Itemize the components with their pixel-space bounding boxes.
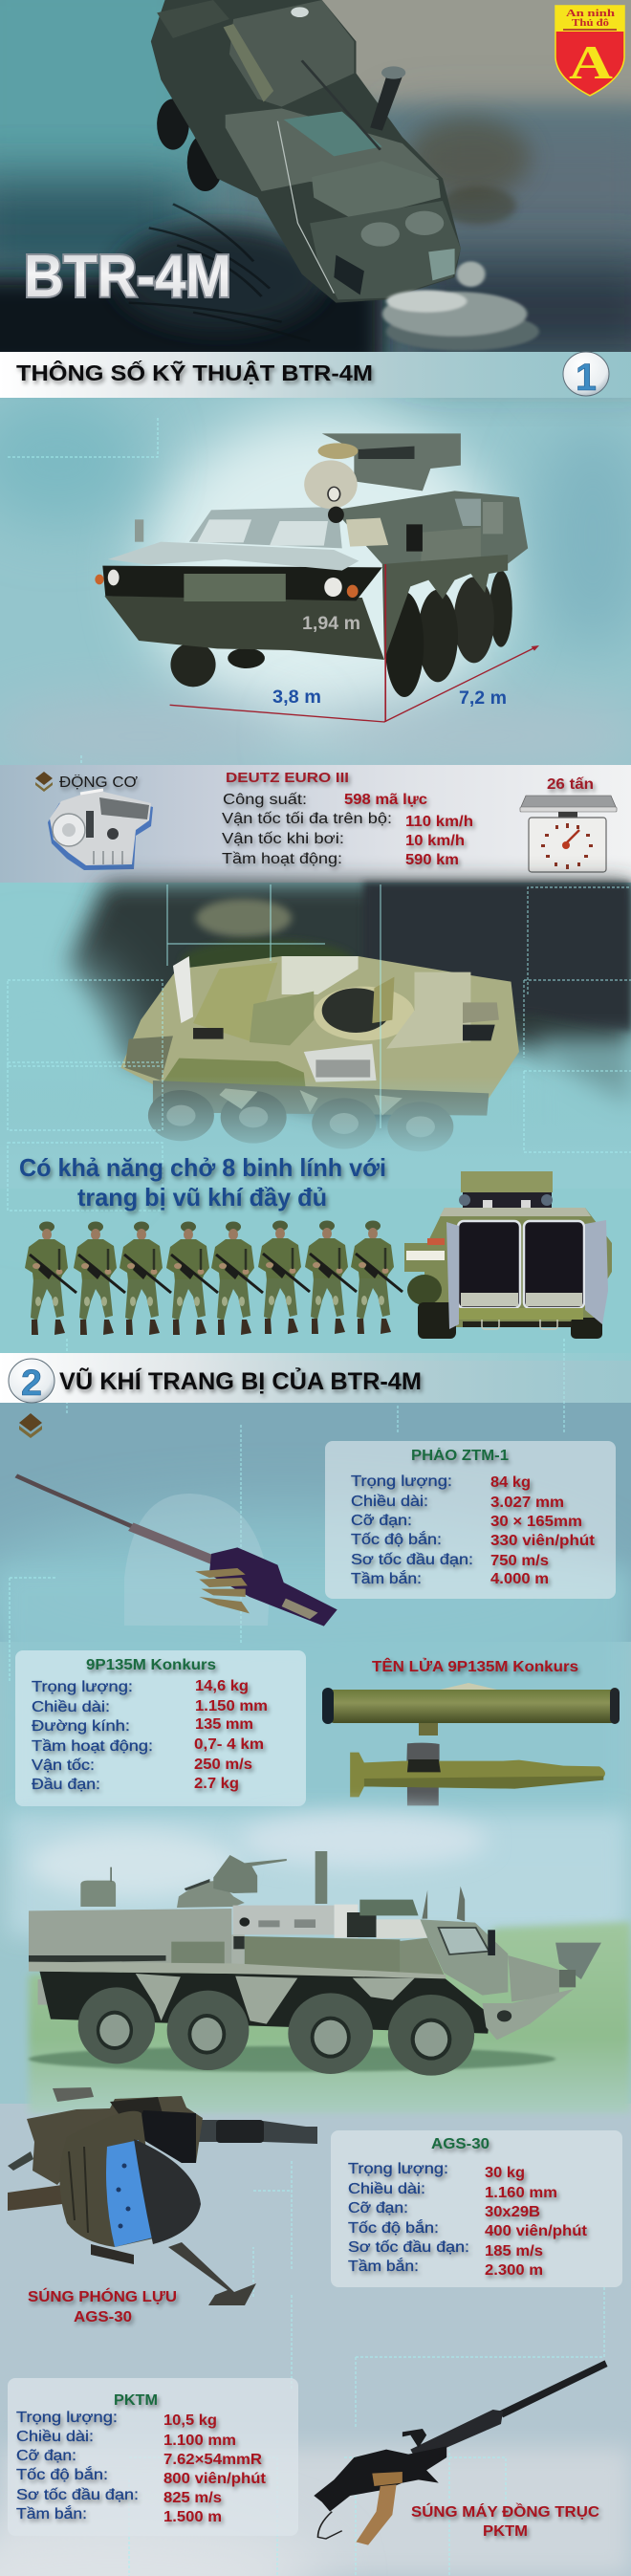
weapon: PKTM machine gun — [314, 2360, 608, 2545]
panel: AGS-30: Cỡ đạn: — [348, 2200, 408, 2216]
text: carrying capacity — [19, 1153, 386, 1212]
panel: 9P135M Konkurs: 9P135M Konkurs — [86, 1657, 216, 1673]
panel: AGS-30 — [331, 2130, 622, 2287]
panel: 9P135M Konkurs: Trọng lượng: — [32, 1679, 133, 1695]
panel: PKTM: Cỡ đạn: — [16, 2448, 76, 2464]
engine spec text: Vận tốc khi bơi: — [222, 831, 344, 847]
panel: ZTM-1: Sơ tốc đầu đạn: — [351, 1552, 473, 1568]
PKTM label — [411, 2502, 599, 2540]
panel: AGS-30: 2.300 m — [485, 2262, 543, 2279]
panel: ZTM-1: 4.000 m — [490, 1571, 549, 1587]
icon: engine — [48, 790, 153, 870]
panel: PKTM: 7.62×54mmR — [163, 2452, 262, 2468]
panel: ZTM-1: PHÁO ZTM-1 — [411, 1448, 509, 1464]
panel: engine specs — [0, 765, 631, 883]
AGS-30 label: SÚNG PHÓNG LỰU — [28, 2287, 177, 2305]
logo: An ninh Thủ đô shield: An ninh — [566, 8, 615, 19]
text: carrying capacity: trang bị vũ khí đầy đủ — [77, 1183, 327, 1212]
weapon: ZTM-1 cannon — [16, 1475, 337, 1626]
weapon: AGS-30 grenade launcher — [8, 2087, 317, 2305]
engine spec text: Tầm hoạt động: — [222, 851, 342, 867]
engine spec text: 10 km/h — [405, 833, 465, 849]
engine spec text — [222, 770, 473, 868]
header band 1 — [0, 352, 631, 398]
panel: 9P135M Konkurs: 1.150 mm — [195, 1698, 268, 1714]
panel: AGS-30: AGS-30 — [431, 2136, 490, 2152]
panel: 9P135M Konkurs: Đường kính: — [32, 1718, 130, 1735]
heading: weapons: VŨ KHÍ TRANG BỊ CỦA BTR-4M — [59, 1366, 422, 1395]
badge 2: 2 — [21, 1364, 42, 1404]
panel: AGS-30: 30 kg — [485, 2165, 525, 2181]
icon: layers — [19, 1413, 42, 1438]
panel: 9P135M Konkurs — [15, 1650, 306, 1806]
panel: 9P135M Konkurs: 135 mm — [195, 1716, 253, 1733]
missile label: TÊN LỬA 9P135M Konkurs — [372, 1657, 578, 1675]
dimension labels: 7,2 m — [459, 688, 507, 709]
engine label: ĐỘNG CƠ — [59, 775, 138, 791]
logo: An ninh Thủ đô shield — [555, 6, 624, 96]
vehicle rear view with open doors — [404, 1171, 612, 1339]
panel: 9P135M Konkurs: 250 m/s — [194, 1757, 252, 1773]
badge 1 — [563, 352, 609, 399]
panel: PKTM: 1.500 m — [163, 2509, 222, 2525]
panel: ZTM-1 — [325, 1441, 616, 1599]
panel: AGS-30: Trọng lượng: — [348, 2161, 448, 2177]
panel: 9P135M Konkurs: 2.7 kg — [194, 1776, 239, 1792]
panel: 9P135M Konkurs: Đầu đạn: — [32, 1777, 100, 1793]
panel: ZTM-1: 84 kg — [490, 1474, 531, 1491]
missile launch tube — [322, 1683, 620, 1736]
panel: AGS-30: 30x29B — [485, 2204, 540, 2220]
panel: ZTM-1: Trọng lượng: — [351, 1474, 452, 1490]
panel: ZTM-1: 3.027 mm — [490, 1495, 564, 1511]
engine spec text: Công suất: — [223, 792, 307, 808]
panel: ZTM-1: Cỡ đạn: — [351, 1513, 412, 1529]
panel: AGS-30: Chiều dài: — [348, 2181, 425, 2197]
icon: layers — [35, 772, 53, 792]
panel: PKTM: Chiều dài: — [16, 2429, 94, 2445]
panel: PKTM: PKTM — [114, 2392, 158, 2409]
panel: 9P135M Konkurs: Tầm hoạt động: — [32, 1738, 153, 1755]
badge 2 — [9, 1359, 54, 1404]
PKTM label: PKTM — [483, 2523, 528, 2540]
badge 1: 1 — [576, 357, 597, 399]
panel: AGS-30: 185 m/s — [485, 2243, 543, 2259]
panel: ZTM-1: Tốc độ bắn: — [351, 1532, 442, 1548]
hero photo: BTR-4M in water — [0, 0, 631, 373]
logo: An ninh Thủ đô shield: A — [569, 35, 613, 89]
panel: PKTM: 800 viên/phút — [163, 2471, 266, 2487]
weight label: 26 tấn — [547, 776, 594, 793]
panel: PKTM: Tốc độ bắn: — [16, 2467, 108, 2483]
text: carrying capacity: Có khả năng chở 8 binh lính với — [19, 1153, 386, 1182]
photo: vehicle from above — [0, 883, 631, 1211]
missile — [350, 1743, 605, 1805]
panel: AGS-30: Tốc độ bắn: — [348, 2220, 439, 2237]
dimension labels: 1,94 m — [302, 614, 360, 634]
logo: An ninh Thủ đô shield: Thủ đô — [572, 17, 610, 29]
panel: ZTM-1: 750 m/s — [490, 1553, 549, 1569]
engine spec text: 598 mã lực — [344, 792, 427, 808]
panel: AGS-30: Tầm bắn: — [348, 2259, 419, 2275]
panel: 9P135M Konkurs: 0,7- 4 km — [194, 1736, 264, 1753]
panel: AGS-30: 1.160 mm — [485, 2185, 557, 2201]
engine spec text: 590 km — [405, 852, 459, 868]
engine spec text: DEUTZ EURO III — [226, 770, 349, 786]
photo: BTR-4M side view — [8, 1812, 631, 2113]
panel: AGS-30: 400 viên/phút — [485, 2223, 587, 2239]
engine spec text: Vận tốc tối đa trên bộ: — [222, 811, 392, 827]
panel: PKTM: 1.100 mm — [163, 2433, 236, 2449]
AGS-30 label: AGS-30 — [74, 2309, 132, 2325]
panel: ZTM-1: 330 viên/phút — [490, 1533, 595, 1549]
panel: PKTM — [8, 2378, 298, 2536]
panel: PKTM: 825 m/s — [163, 2490, 222, 2506]
panel: ZTM-1: Chiều dài: — [351, 1494, 428, 1510]
panel: PKTM: Tầm bắn: — [16, 2506, 87, 2522]
panel: PKTM: Trọng lượng: — [16, 2410, 118, 2426]
panel: PKTM: Sơ tốc đầu đạn: — [16, 2487, 139, 2503]
title: BTR-4M: BTR-4M — [24, 244, 231, 310]
engine spec text: 110 km/h — [405, 814, 473, 830]
PKTM label: SÚNG MÁY ĐỒNG TRỤC — [411, 2502, 599, 2521]
icon: weighing scale — [520, 796, 617, 872]
dimension labels: 3,8 m — [272, 688, 321, 708]
panel: AGS-30: Sơ tốc đầu đạn: — [348, 2239, 469, 2256]
panel: PKTM: 10,5 kg — [163, 2412, 217, 2429]
panel: 9P135M Konkurs: 14,6 kg — [195, 1678, 249, 1694]
overlay circuit lines — [8, 884, 631, 1211]
dome decoration — [124, 1494, 270, 1626]
water splash — [382, 261, 539, 351]
panel: 9P135M Konkurs: Chiều dài: — [32, 1699, 110, 1715]
AGS-30 label — [28, 2287, 177, 2325]
soldiers — [25, 1220, 403, 1335]
heading: technical specs: THÔNG SỐ KỸ THUẬT BTR-4M — [16, 360, 373, 385]
panel: ZTM-1: 30 × 165mm — [490, 1514, 582, 1530]
dimension labels — [272, 614, 507, 709]
header band 2 — [0, 1353, 631, 1403]
vehicle — [151, 0, 461, 303]
panel: 9P135M Konkurs: Vận tốc: — [32, 1757, 95, 1774]
panel: ZTM-1: Tầm bắn: — [351, 1571, 422, 1587]
vehicle front view with dimensions — [95, 433, 539, 722]
